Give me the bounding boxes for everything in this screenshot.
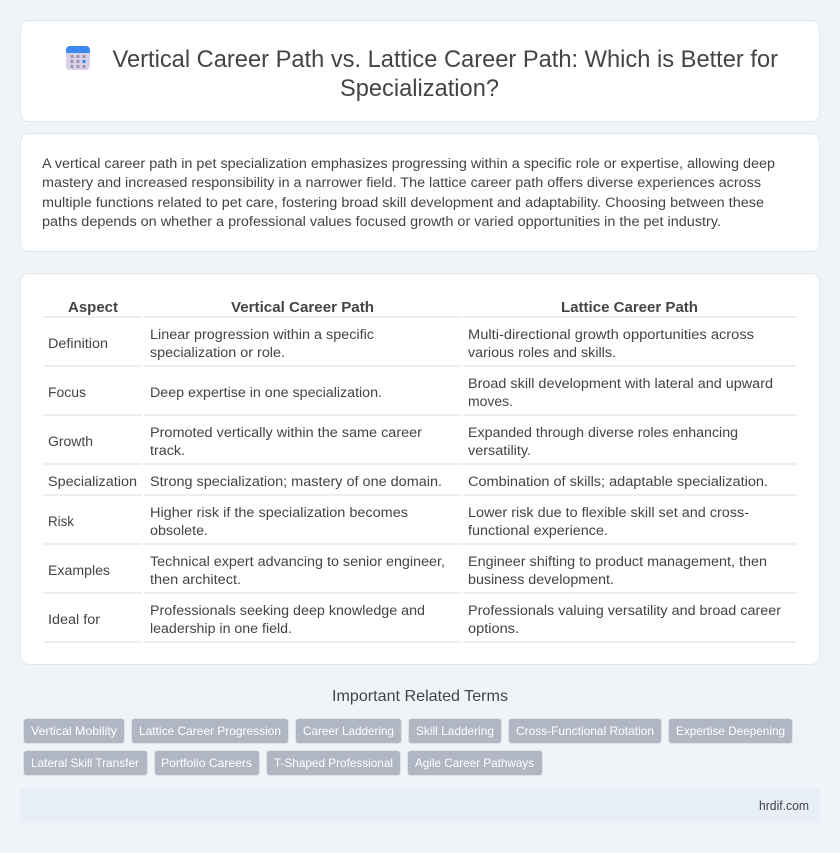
row: risk: functional experience.	[468, 523, 608, 539]
row: specialization: Strong specialization; mastery of one domain.	[150, 474, 442, 490]
row: growth: versatility.	[468, 443, 531, 459]
row: risk: Lower risk due to flexible skill set and cross-	[468, 505, 749, 521]
row: definition: Definition	[48, 336, 108, 352]
icon: calendar	[66, 46, 90, 70]
related term tags: Lateral Skill Transfer	[31, 756, 139, 770]
row: growth	[48, 425, 738, 459]
row: definition: specialization or role.	[150, 345, 285, 361]
row: examples: Engineer shifting to product management, then	[468, 554, 767, 570]
title	[112, 46, 778, 102]
row: risk	[48, 505, 749, 539]
row: ideal for: options.	[468, 621, 519, 637]
row: ideal for: Professionals seeking deep knowledge and	[150, 603, 425, 619]
related term tags: Lattice Career Progression	[139, 724, 281, 738]
row: focus: Focus	[48, 385, 86, 401]
footer	[20, 789, 820, 823]
row: focus: moves.	[468, 394, 513, 410]
row: examples: Examples	[48, 563, 110, 579]
row: examples	[48, 554, 767, 588]
row: growth: Expanded through diverse roles enhancing	[468, 425, 738, 441]
row: growth: Growth	[48, 434, 93, 450]
row: risk: obsolete.	[150, 523, 208, 539]
panel: title header	[20, 20, 820, 122]
footer: hrdif.com	[759, 798, 809, 813]
related term tags: Skill Laddering	[416, 724, 494, 738]
row: risk: Risk	[48, 514, 75, 530]
related term tags: Cross-Functional Rotation	[516, 724, 654, 738]
related term tags: Expertise Deepening	[676, 724, 785, 738]
row: risk: Higher risk if the specialization becomes	[150, 505, 408, 521]
row: focus: Deep expertise in one specialization.	[150, 385, 382, 401]
row: focus	[48, 376, 773, 410]
row: focus: Broad skill development with lateral and upward	[468, 376, 773, 392]
panel: comparison table	[20, 274, 820, 664]
title: Specialization?	[340, 75, 499, 102]
panel: introduction text: multiple functions related to pet care, fostering broad skill development and adaptability. Choosing between these	[42, 195, 764, 211]
related term tags: Vertical Mobility	[31, 724, 117, 738]
row: specialization	[48, 474, 768, 490]
row: ideal for	[48, 603, 781, 637]
panel: introduction text: A vertical career path in pet specialization emphasizes progressing within a specific role or expertise, allowing deep	[42, 156, 775, 172]
row: examples: Technical expert advancing to senior engineer,	[150, 554, 445, 570]
row: specialization: Specialization	[48, 474, 137, 490]
row: growth: track.	[150, 443, 185, 459]
row: definition: various roles and skills.	[468, 345, 616, 361]
panel: introduction text	[20, 134, 820, 252]
table header row: Vertical Career Path	[231, 299, 374, 316]
table header row: Lattice Career Path	[561, 299, 698, 316]
heading: important related terms: Important Related Terms	[332, 688, 508, 705]
related term tags: Portfolio Careers	[161, 756, 252, 770]
row: specialization: Combination of skills; adaptable specialization.	[468, 474, 768, 490]
row: definition: Multi-directional growth opportunities across	[468, 327, 754, 343]
row: definition	[48, 327, 754, 361]
row: examples: then architect.	[150, 572, 241, 588]
row: definition: Linear progression within a specific	[150, 327, 374, 343]
related term tags	[24, 718, 792, 776]
panel: introduction text: paths depends on whether a professional values focused growth or varied opportunities in the pet industry.	[42, 214, 721, 230]
panel: introduction text: mastery and increased responsibility in a narrower field. The lattice career path offers diverse experiences across	[42, 175, 761, 191]
row: growth: Promoted vertically within the same career	[150, 425, 422, 441]
related term tags: Agile Career Pathways	[415, 756, 534, 770]
table header row	[68, 299, 698, 316]
title: Vertical Career Path vs. Lattice Career Path: Which is Better for	[112, 46, 778, 73]
related term tags: Career Laddering	[303, 724, 394, 738]
row: ideal for: leadership in one field.	[150, 621, 292, 637]
related term tags: T-Shaped Professional	[274, 756, 393, 770]
row: examples: business development.	[468, 572, 614, 588]
table header row: Aspect	[68, 299, 118, 316]
row: ideal for: Ideal for	[48, 612, 100, 628]
row: ideal for: Professionals valuing versatility and broad career	[468, 603, 781, 619]
